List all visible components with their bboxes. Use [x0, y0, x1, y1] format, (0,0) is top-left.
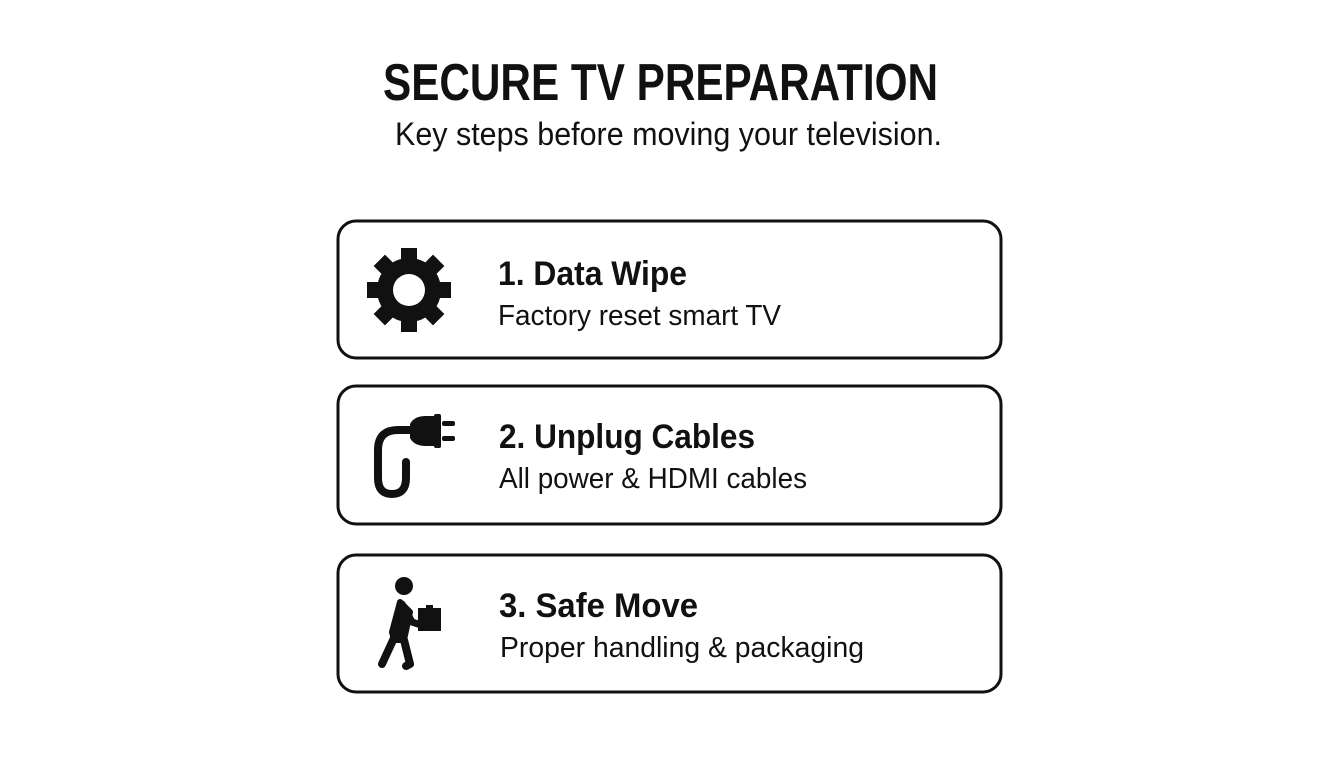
- text: all power: All power & HDMI cables: [499, 463, 807, 495]
- icon: gear: [367, 248, 451, 332]
- title: SECURE TV PREPARATION: [383, 54, 938, 112]
- panel: safe move: [338, 555, 1001, 692]
- icon: plug: [378, 414, 455, 494]
- heading: safe move: 3. Safe Move: [499, 587, 698, 625]
- heading: unplug cables: 2. Unplug Cables: [499, 418, 755, 456]
- subtitle: Key steps before moving your television.: [395, 116, 942, 152]
- text: proper handling: Proper handling & packaging: [500, 632, 864, 664]
- heading: data wipe: 1. Data Wipe: [498, 255, 687, 293]
- icon: person carrying box: [382, 577, 441, 666]
- panel: data wipe: [338, 221, 1001, 358]
- panel: unplug cables: [338, 386, 1001, 524]
- text: factory reset: Factory reset smart TV: [498, 300, 782, 332]
